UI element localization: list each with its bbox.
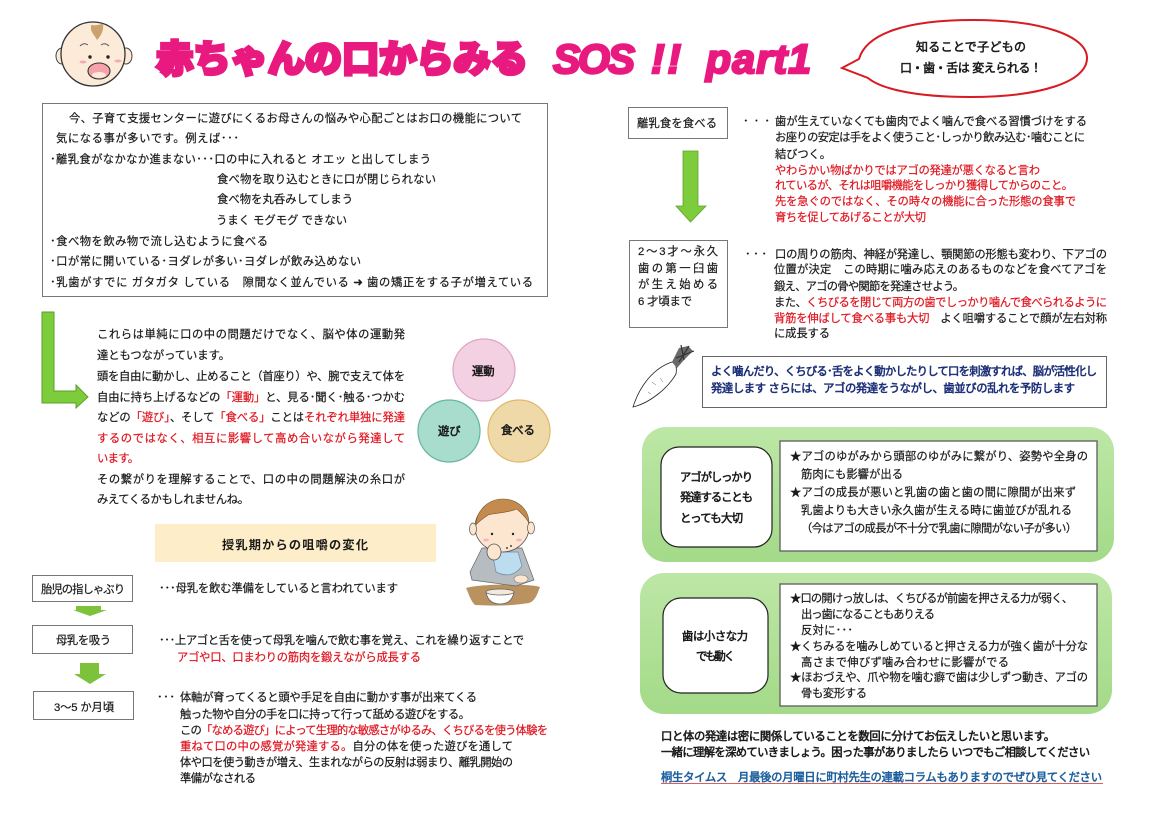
text block: age 2 to 6 description: また、くちびるを閉じて両方の歯でしっかり噛んで食べられるように: [774, 295, 1107, 309]
text block: weaning food description: 歯が生えていなくても歯肉でよく噛んで食べる習慣づけをする: [775, 114, 1087, 128]
jaw heading rounded box: アゴがしっかり: [680, 470, 753, 484]
flow step: breastfeeding: 母乳を吸う: [56, 634, 111, 647]
teeth details box: 反対に･･･: [801, 624, 853, 637]
panel: worries intro box: ･乳歯がすでに ガタガタ している 隙間なく並んでいる ➜ 歯の矯正をする子が増えている: [50, 275, 533, 289]
jaw heading rounded box: とっても大切: [680, 511, 743, 525]
text block: development explanation: 達ともつながっています。: [97, 348, 230, 362]
text block: breastfeeding description: ･･･上アゴと舌を使って母乳を噛んで飲む事を覚え、これを繰り返すことで: [159, 633, 524, 647]
text block: weaning food description: 先を急ぐのではなく、その時々の機能に合った形態の食事で: [775, 194, 1076, 208]
text block: development explanation: その繋がりを理解することで、口の中の問題解決の糸口が: [97, 472, 405, 486]
callout bubble: 知ることで子どもの: [916, 40, 1026, 54]
diagram: three overlapping development circles: 食べる: [501, 424, 535, 437]
text block: weaning food description: やわらかい物ばかりではアゴの発達が悪くなると言わ: [775, 163, 1040, 177]
panel: jaw development: [642, 427, 1114, 562]
panel: worries intro box: 食べ物を丸呑みしてしまう: [217, 192, 353, 206]
flow step: breastfeeding: [32, 626, 132, 654]
text block: 3 to 5 months description: 体や口を使う動きが増え、生まれながらの反射は弱まり、離乳開始の: [180, 755, 513, 769]
text block: development explanation: するのではなく、相互に影響して高め合いながら発達して: [97, 431, 405, 445]
teeth details box: 高さまで伸びず噛み合わせに影響がでる: [801, 655, 1009, 669]
text block: age 2 to 6 description: ･･･: [745, 249, 767, 261]
flow step: age 2 to 3 until 6: 6 才頃まで: [638, 294, 692, 308]
text block: weaning food description: れているが、それは咀嚼機能をしっかり獲得してからのこと。: [775, 178, 1073, 192]
flow step: age 2 to 3 until 6: が生え始める: [638, 277, 718, 291]
text block: weaning food description: [743, 114, 1087, 224]
text block: development explanation: [97, 327, 405, 506]
text block: development explanation: などの「遊び」、そして「食べる」ことはそれぞれ単独に発達: [97, 410, 405, 424]
teeth details box: [780, 584, 1097, 706]
teeth details box: 出っ歯になることもありえる: [801, 608, 935, 621]
panel: worries intro box: ･口が常に開いている･ヨダレが多い･ヨダレが飲み込めない: [50, 254, 361, 268]
text block: closing message: 口と体の発達は密に関係していることを数回に分けてお伝えしたいと思います。: [661, 729, 1055, 743]
icon: daikon radish: [633, 345, 694, 407]
title: [156, 36, 811, 82]
teeth heading rounded box: 歯は小さな力: [682, 630, 748, 643]
teeth details box: ★口の開けっ放しは、くちびるが前歯を押さえる力が弱く、: [790, 591, 1073, 605]
text block: 3 to 5 months description: ･･･: [157, 692, 175, 704]
text block: development explanation: みえてくるかもしれませんね。: [97, 493, 249, 506]
text block: thumb sucking description: ･･･母乳を飲む準備をしていると言われています: [159, 581, 398, 595]
flow step: thumb sucking: [32, 576, 132, 602]
text block: newspaper column note: 桐生タイムス 月最後の月曜日に町村先生の連載コラムもありますのでぜひ見てください: [661, 770, 1102, 784]
panel: worries intro box: 今、子育て支援センターに遊びにくるお母さんの悩みや心配ごとはお口の機能について: [69, 111, 522, 125]
panel: worries intro box: うまく モグモグ できない: [216, 213, 347, 227]
heading: chewing changes banner: 授乳期からの咀嚼の変化: [222, 537, 368, 552]
callout: chewing benefits box: よく噛んだり、くちびる･舌をよく動かしたりして口を刺激すれば、脳が活性化し: [711, 364, 1097, 378]
flow step: age 2 to 3 until 6: 2～3才～永久: [638, 244, 718, 258]
text block: weaning food description: 育ちを促してあげることが大切: [775, 210, 926, 224]
jaw details box: ★アゴのゆがみから頭部のゆがみに繋がり、姿勢や全身の: [790, 449, 1088, 463]
flow step: 3 to 5 months: [34, 692, 134, 720]
text block: development explanation: 頭を自由に動かし、止めること（首座り）や、腕で支えて体を: [97, 369, 405, 383]
jaw details box: 乳歯よりも大きい永久歯が生える時に歯並びが乱れる: [801, 503, 1072, 517]
panel: teeth move with small force: [640, 573, 1112, 714]
diagram: three overlapping development circles: [418, 339, 550, 462]
title: 赤ちゃんの口からみる: [156, 38, 528, 80]
text block: 3 to 5 months description: 重ねて口の中の感覚が発達する。自分の体を使った遊びを通して: [180, 739, 513, 753]
callout bubble: [842, 20, 1087, 97]
diagram: three overlapping development circles: 運動: [472, 364, 495, 378]
flow step: age 2 to 3 until 6: 歯の第一臼歯: [638, 261, 718, 275]
text block: breastfeeding description: アゴや口、口まわりの筋肉を鍛えながら成長する: [177, 650, 421, 664]
panel: worries intro box: ･離乳食がなかなか進まない･･･口の中に入れると オエッ と出してしまう: [50, 152, 431, 166]
panel: worries intro box: [42, 104, 548, 296]
text block: age 2 to 6 description: 鍛え、アゴの骨や関節を発達させよう。: [774, 279, 964, 293]
text block: 3 to 5 months description: [157, 690, 548, 785]
flow step: thumb sucking: 胎児の指しゃぶり: [41, 582, 125, 596]
teeth details box: ★ほおづえや、爪や物を噛む癖で歯は少しずつ動き、アゴの: [790, 670, 1088, 684]
text block: 3 to 5 months description: 準備がなされる: [180, 771, 256, 785]
teeth details box: ★くちみるを噛みしめていると押さえる力が強く歯が十分な: [790, 639, 1088, 653]
text block: development explanation: います。: [97, 452, 139, 465]
arrow: L-shaped green arrow: [42, 312, 88, 408]
panel: worries intro box: 食べ物を取り込むときに口が閉じられない: [217, 172, 436, 186]
jaw heading rounded box: 発達することも: [680, 490, 753, 504]
text block: closing message: [661, 729, 1090, 759]
jaw details box: ★アゴの成長が悪いと乳歯の歯と歯の間に隙間が出来ず: [790, 485, 1076, 499]
arrow: step two to three: [74, 663, 106, 684]
jaw details box: 筋肉にも影響が出る: [801, 467, 903, 481]
jaw details box: （今はアゴの成長が不十分で乳歯に隙間がない子が多い）: [801, 521, 1077, 535]
text block: age 2 to 6 description: 背筋を伸ばして食べる事も大切 よく咀嚼することで顔が左右対称: [774, 311, 1107, 325]
jaw heading rounded box: [661, 447, 772, 547]
text block: age 2 to 6 description: [745, 247, 1107, 340]
text block: weaning food description: お座りの安定は手をよく使うこと･しっかり飲み込む･噛むことに: [775, 130, 1085, 144]
title: part1: [705, 36, 811, 82]
text block: 3 to 5 months description: 触った物や自分の手を口に持って行って舐める遊びをする。: [180, 707, 470, 721]
text block: 3 to 5 months description: この「なめる遊び」によって生理的な敏感さがゆるみ、くちびるを使う体験を: [180, 723, 548, 737]
heading: chewing changes banner: [155, 524, 436, 562]
text block: weaning food description: ･･･: [743, 116, 770, 128]
callout: chewing benefits box: 発達します さらには、アゴの発達をうながし、歯並びの乱れを予防します: [711, 381, 1075, 395]
teeth heading rounded box: でも動く: [696, 649, 735, 663]
teeth details box: 骨も変形する: [801, 687, 867, 700]
text block: breastfeeding description: [159, 633, 524, 664]
text block: age 2 to 6 description: 口の周りの筋肉、神経が発達し、顎関節の形態も変わり、下アゴの: [775, 247, 1107, 261]
flow step: weaning food: 離乳食を食べる: [637, 116, 717, 130]
text block: development explanation: 自由に持ち上げるなどの「運動」と、見る･聞く･触る･つかむ: [97, 390, 405, 404]
panel: worries intro box: ･食べ物を飲み物で流し込むように食べる: [50, 234, 268, 248]
flow step: age 2 to 3 until 6: [630, 240, 728, 328]
icon: baby eating at table: [466, 499, 540, 606]
title: SOS: [553, 36, 635, 82]
flow step: weaning food: [628, 108, 728, 138]
text block: development explanation: これらは単純に口の中の問題だけでなく、脳や体の運動発: [97, 327, 405, 341]
flow step: 3 to 5 months: 3～5 か月頃: [54, 701, 115, 714]
callout: chewing benefits box: [702, 356, 1106, 408]
text block: closing message: 一緒に理解を深めていきましょう。困った事がありましたら いつでもご相談してください: [661, 745, 1090, 759]
jaw details box: [780, 441, 1097, 551]
teeth heading rounded box: [663, 598, 768, 693]
text block: age 2 to 6 description: に成長する: [774, 327, 830, 340]
text block: 3 to 5 months description: 体軸が育ってくると頭や手足を自由に動かす事が出来てくる: [180, 690, 477, 704]
callout bubble: 口・歯・舌は 変えられる！: [900, 60, 1042, 75]
text block: age 2 to 6 description: 位置が決定 この時期に噛み応えのあるものなどを食べてアゴを: [774, 262, 1107, 276]
arrow: large green down arrow: [676, 151, 706, 222]
text block: weaning food description: 結びつく。: [775, 148, 831, 161]
diagram: three overlapping development circles: 遊び: [438, 424, 461, 438]
title: !!: [651, 36, 681, 82]
icon: crying baby face: [56, 22, 132, 86]
arrow: step one to two: [73, 606, 107, 616]
panel: worries intro box: 気になる事が多いです。例えば･･･: [56, 131, 239, 145]
